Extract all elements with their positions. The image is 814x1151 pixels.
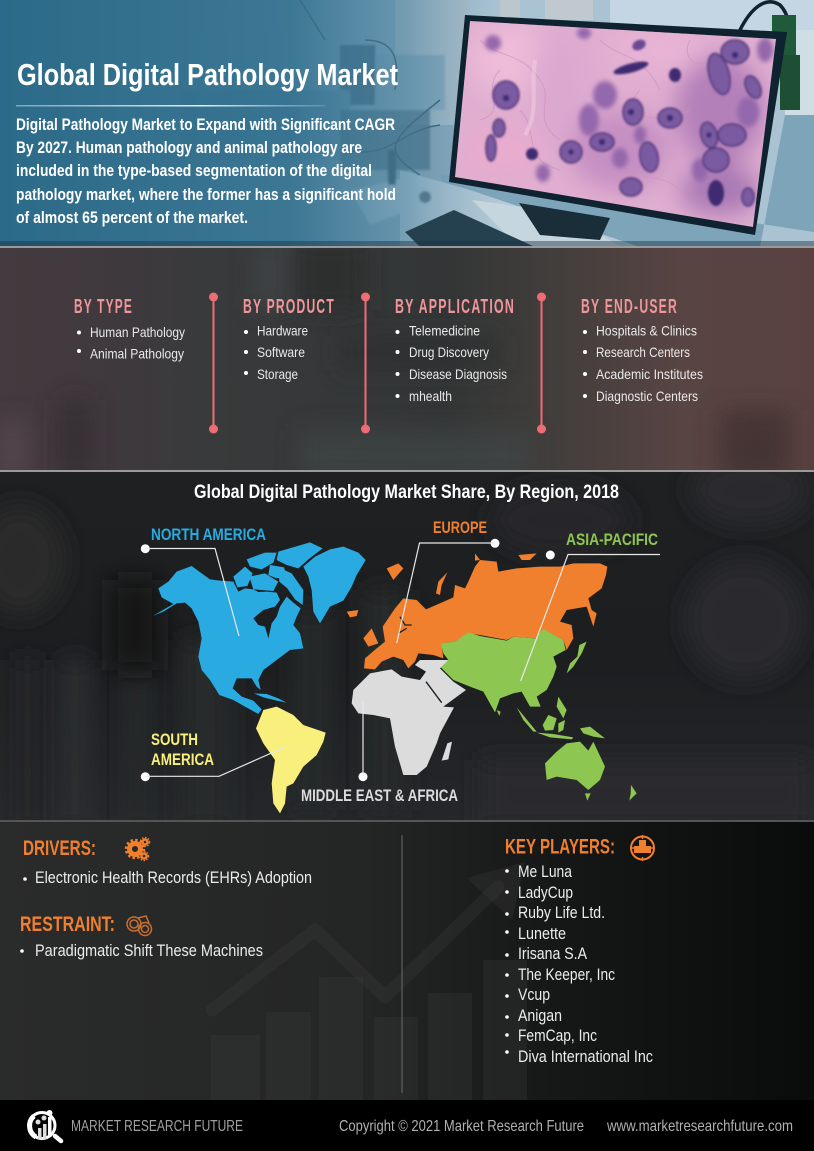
key players list: FemCap, Inc — [518, 1026, 597, 1045]
monitor with stained tissue — [405, 2, 800, 248]
heading: restraint: RESTRAINT: — [20, 913, 115, 936]
key players list: The Keeper, Inc — [518, 965, 615, 984]
key players list — [505, 862, 653, 1066]
callout: south america: AMERICA — [151, 750, 214, 769]
column: by application: mhealth — [409, 388, 452, 404]
world map — [153, 542, 637, 813]
key players list: Irisana S.A — [518, 944, 588, 963]
column: by application: Drug Discovery — [409, 344, 489, 360]
hero photo: lab with microscope and monitor — [300, 0, 814, 246]
callout: south america — [141, 730, 286, 781]
key players list: Lunette — [518, 924, 566, 943]
intro paragraph: Digital Pathology Market to Expand with Significant CAGR — [16, 115, 395, 134]
callout: europe: EUROPE — [433, 518, 487, 537]
column: by product — [243, 296, 335, 382]
region: asia-pacific — [440, 629, 637, 801]
column: by application: BY APPLICATION — [395, 296, 515, 318]
microscope equipment — [337, 44, 446, 224]
key players list: LadyCup — [518, 883, 573, 902]
column: by application — [395, 296, 515, 404]
title: Global Digital Pathology Market — [17, 57, 398, 92]
column: by product: Hardware — [257, 322, 308, 338]
driver item: Electronic Health Records (EHRs) Adoption — [35, 868, 312, 887]
restraint item: Paradigmatic Shift These Machines — [35, 941, 263, 960]
region: middle east and africa — [352, 660, 466, 775]
brand name: MARKET RESEARCH FUTURE — [71, 1118, 243, 1135]
key players list: Vcup — [518, 985, 550, 1004]
callout: north america — [141, 525, 266, 636]
heading: Global Digital Pathology Market Share, By Region, 2018 — [194, 482, 619, 503]
callout: asia-pacific — [521, 530, 660, 681]
callout: middle east and africa — [301, 701, 458, 805]
column: by type: Human Pathology — [90, 324, 185, 340]
heading: drivers: DRIVERS: — [23, 837, 96, 860]
column: by type — [74, 296, 185, 362]
region: south america — [256, 707, 326, 813]
icon: gears — [126, 838, 150, 860]
column: by type: BY TYPE — [74, 296, 133, 318]
column: by end-user: Academic Institutes — [596, 366, 703, 382]
key players list: Anigan — [518, 1006, 562, 1025]
icon: handcuffs — [127, 916, 152, 936]
intro paragraph: pathology market, where the former has a significant hold — [16, 185, 396, 204]
divider marker 3 — [537, 292, 546, 434]
intro paragraph: By 2027. Human pathology and animal pathology are — [16, 138, 362, 157]
icon: target people — [630, 835, 655, 861]
column: by end-user: Diagnostic Centers — [596, 388, 698, 404]
region: north america — [153, 542, 366, 714]
footer — [0, 1100, 814, 1151]
panel: market segmentation — [0, 240, 814, 480]
icon: logo magnifier — [29, 1110, 61, 1141]
column: by application: Disease Diagnosis — [409, 366, 507, 382]
intro paragraph — [16, 115, 396, 227]
callout: asia-pacific: ASIA-PACIFIC — [566, 530, 658, 549]
panel: hero header — [0, 0, 814, 248]
callout: south america: SOUTH — [151, 730, 198, 749]
intro paragraph: of almost 65 percent of the market. — [16, 208, 248, 227]
callout: europe — [397, 518, 500, 643]
key players list: Ruby Life Ltd. — [518, 903, 605, 922]
region: europe and russia — [347, 553, 607, 669]
column: by end-user: Research Centers — [596, 344, 690, 360]
column: by type: Animal Pathology — [90, 346, 184, 362]
teal overlay on left of the hero — [0, 0, 814, 247]
key players list: Me Luna — [518, 862, 572, 881]
heading: key players: KEY PLAYERS: — [505, 836, 615, 858]
column: by product: BY PRODUCT — [243, 296, 335, 318]
column: by product: Software — [257, 344, 305, 360]
column: by end-user: Hospitals & Clinics — [596, 322, 697, 338]
callout: middle east and africa: MIDDLE EAST & AFRICA — [301, 786, 458, 805]
key players list: Diva International Inc — [518, 1047, 653, 1066]
panel: regional share map — [0, 455, 814, 830]
copyright: Copyright © 2021 Market Research Future — [339, 1118, 584, 1135]
column: by product: Storage — [257, 366, 298, 382]
column: by end-user — [581, 296, 703, 404]
panel: drivers, restraint, key players — [0, 820, 814, 1102]
callout: north america: NORTH AMERICA — [151, 525, 266, 544]
intro paragraph: included in the type-based segmentation of the digital — [16, 161, 372, 180]
column: by end-user: BY END-USER — [581, 296, 678, 318]
divider marker 1 — [209, 292, 218, 434]
column: by application: Telemedicine — [409, 322, 480, 338]
divider marker 2 — [361, 292, 370, 434]
